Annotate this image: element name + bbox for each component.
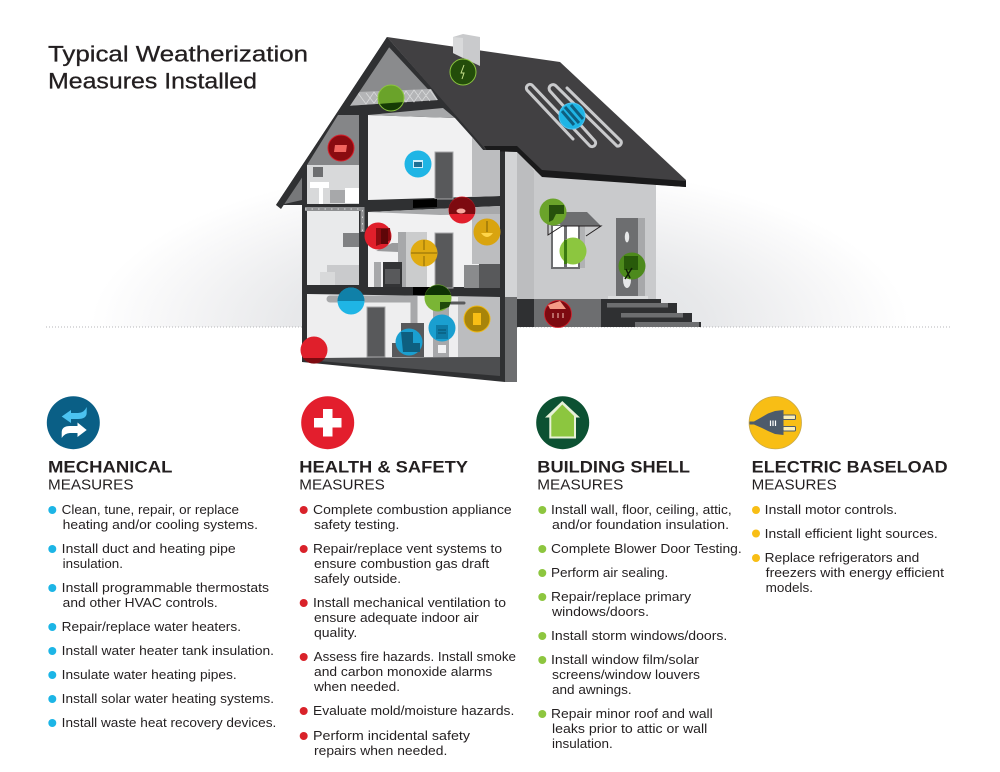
list: mechanical items: Install waste heat recovery devices. [62, 715, 276, 730]
list: health and safety items: quality. [314, 625, 357, 640]
gable rake [276, 37, 392, 209]
ground glow [80, 170, 920, 327]
roof [387, 37, 686, 187]
upper floor room [368, 108, 500, 200]
basement room [307, 294, 500, 358]
list: electric baseload items: Replace refrigerators and [765, 550, 919, 565]
chimney [453, 34, 480, 66]
bathroom room [307, 115, 359, 204]
heading: electric baseload: MEASURES [752, 478, 837, 494]
list: health and safety items: Assess fire hazards. Install smoke [314, 649, 516, 664]
list: health and safety items: ensure adequate indoor air [314, 610, 479, 625]
list: building shell items: Repair/replace primary [551, 589, 692, 604]
marker: red attic vent [328, 135, 354, 161]
house illustration [276, 34, 701, 382]
panel: mechanical measures [47, 396, 276, 730]
heading: building shell: BUILDING SHELL [537, 458, 690, 477]
roof soffit [484, 146, 686, 187]
floor gap [413, 199, 437, 208]
list: building shell items: windows/doors. [551, 604, 649, 619]
list: electric baseload items: Install efficient light sources. [765, 526, 938, 541]
living room [307, 210, 359, 285]
icon: health cross [301, 396, 354, 449]
list: mechanical items: Install water heater tank insulation. [62, 643, 274, 658]
list: mechanical items [48, 502, 276, 730]
list: mechanical items: heating and/or cooling systems. [63, 517, 258, 532]
heading: electric baseload: ELECTRIC BASELOAD [752, 458, 948, 477]
list: electric baseload items: models. [766, 580, 813, 595]
list: mechanical items: Clean, tune, repair, or replace [62, 502, 239, 517]
heading: electric baseload [752, 458, 948, 494]
right exterior wall [505, 150, 656, 299]
attic gable [346, 45, 438, 106]
front door [608, 218, 648, 299]
attic insulation [346, 89, 438, 106]
marker: yellow appliance [464, 306, 490, 332]
marker: foundation hazard [300, 336, 328, 364]
list: building shell items: insulation. [552, 736, 613, 751]
front steps [601, 299, 701, 327]
marker: duct insulation [338, 288, 364, 314]
list: mechanical items: Install solar water heating systems. [62, 691, 274, 706]
marker: chimney electric [450, 59, 476, 85]
list: health and safety items: safety testing. [314, 517, 399, 532]
window with awning [548, 212, 601, 269]
marker: furnace [396, 328, 422, 356]
kitchen room [368, 206, 500, 288]
list: building shell items [538, 502, 742, 751]
panel: electric baseload measures [749, 396, 948, 595]
marker: ventilation [364, 222, 392, 250]
list: building shell items: Install storm windows/doors. [551, 628, 727, 643]
list: electric baseload items [752, 502, 944, 595]
panel: building shell measures [536, 396, 742, 751]
heading: health and safety [299, 458, 469, 494]
list: building shell items: screens/window louvers [552, 667, 701, 682]
solar water heating coil [526, 84, 621, 147]
list: building shell items: and/or foundation insulation. [552, 517, 729, 532]
title: Typical Weatherization [48, 42, 308, 67]
marker: thermostat [404, 150, 432, 178]
list: electric baseload items: Install motor controls. [765, 502, 897, 517]
marker: water pipe insulation [424, 284, 452, 312]
marker: smoke alarm [448, 196, 476, 224]
list: health and safety items: Perform incidental safety [313, 728, 471, 743]
list: mechanical items: and other HVAC controls. [63, 595, 218, 610]
list: health and safety items: repairs when needed. [314, 743, 447, 758]
icon: green house [536, 396, 589, 449]
list: electric baseload items: freezers with energy efficient [766, 565, 944, 580]
list: building shell items: Install wall, floor, ceiling, attic, [551, 502, 732, 517]
heading: mechanical [48, 458, 172, 494]
list: health and safety items: Complete combustion appliance [313, 502, 512, 517]
panel: health and safety measures [299, 396, 516, 758]
marker: door [618, 252, 646, 280]
marker: solar water heater [559, 103, 585, 129]
basement floor [307, 357, 500, 376]
heading: health and safety: HEALTH & SAFETY [299, 458, 469, 477]
marker: ceiling lamp [474, 218, 500, 246]
marker: foundation wall [544, 300, 572, 328]
marker: awning [540, 198, 566, 226]
marker: attic insulation [378, 85, 404, 111]
list: health and safety items: and carbon monoxide alarms [314, 664, 493, 679]
cutaway frame [276, 37, 505, 382]
heading: mechanical: MEASURES [48, 478, 134, 494]
list: building shell items: Repair minor roof and wall [551, 706, 713, 721]
list: mechanical items: Insulate water heating pipes. [62, 667, 237, 682]
list: building shell items: and awnings. [552, 682, 632, 697]
ground dotted line [46, 326, 951, 328]
floor gap lower [413, 287, 438, 295]
list: mechanical items: Install duct and heating pipe [62, 541, 236, 556]
heading: building shell: MEASURES [537, 478, 623, 494]
list: health and safety items: Install mechanical ventilation to [313, 595, 506, 610]
title: Measures Installed [48, 68, 257, 94]
marker: refrigerator [410, 240, 438, 266]
list: health and safety items: when needed. [313, 679, 400, 694]
list: health and safety items: Repair/replace vent systems to [313, 541, 502, 556]
list: health and safety items: ensure combustion gas draft [314, 556, 490, 571]
duct with fasteners [305, 209, 362, 232]
heading: mechanical: MECHANICAL [48, 458, 172, 477]
list: mechanical items: insulation. [63, 556, 123, 571]
list: health and safety items [300, 502, 516, 758]
list: mechanical items: Install programmable thermostats [62, 580, 270, 595]
marker: window [560, 238, 586, 264]
icon: electric plug [749, 396, 802, 449]
list: mechanical items: Repair/replace water heaters. [62, 619, 241, 634]
list: health and safety items: Evaluate mold/moisture hazards. [313, 703, 514, 718]
list: building shell items: Complete Blower Door Testing. [551, 541, 742, 556]
list: health and safety items: safely outside. [314, 571, 401, 586]
marker: water heater [428, 314, 456, 342]
icon: mechanical arrows [47, 396, 100, 449]
list: building shell items: Install window film/solar [551, 652, 700, 667]
left eave [280, 171, 302, 205]
foundation [505, 297, 601, 382]
heading: building shell [537, 458, 690, 494]
list: building shell items: leaks prior to attic or wall [552, 721, 707, 736]
heading: health and safety: MEASURES [299, 478, 385, 494]
title [48, 42, 308, 94]
list: building shell items: Perform air sealing. [551, 565, 668, 580]
